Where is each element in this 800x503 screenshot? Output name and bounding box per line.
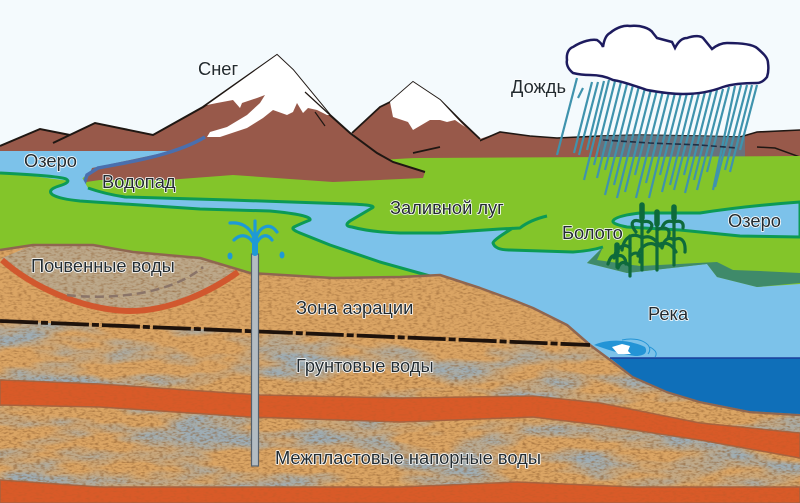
soil lens grey [2,246,234,308]
label: lake right: Озеро [728,210,781,231]
mountain left [0,55,425,182]
layer texture [0,375,800,503]
noise [0,240,800,503]
spring outflow [594,339,656,357]
label: soil water: Почвенные воды [31,255,175,276]
ground outline [0,245,800,415]
label: aeration zone: Зона аэрации [296,297,413,318]
label: swamp: Болото [562,222,623,243]
distant hills right [340,130,800,165]
mountain right [352,82,480,160]
rain hill dashed ridge [603,140,737,148]
label: snow: Снег [198,58,238,79]
icon: fountain [228,221,284,260]
red layer one [0,380,800,458]
ground layers [0,240,800,503]
right lake [613,202,800,237]
river and floodplain [51,174,800,385]
soil dashed line [67,267,203,297]
red layer two [0,480,800,503]
groundwater table line [0,321,590,345]
label: river: Река [648,303,689,324]
cloud [567,26,768,94]
label: rain: Дождь [511,76,566,97]
left lake [0,150,172,182]
sea level [610,357,800,359]
green land [0,156,800,300]
icon: mountain snow cap left [207,55,330,137]
river banks [0,173,603,276]
label: confined interstratal water: Межпластовые напорные воды [275,447,541,468]
label: floodplain meadow: Заливной луг [390,197,504,218]
label: waterfall: Водопад [102,171,176,192]
rain [557,78,757,198]
label: lake left: Озеро [24,150,77,171]
hill tint under rain [600,135,745,157]
sea [610,358,800,414]
waterfall [82,137,205,190]
grey patches [0,322,800,486]
well pipe [252,254,258,466]
label: groundwater: Грунтовые воды [296,355,434,376]
marsh shore [587,247,800,287]
icon: mountain snow cap right [390,82,465,130]
icon: marsh reeds [608,205,685,276]
soil water arc [2,260,238,311]
